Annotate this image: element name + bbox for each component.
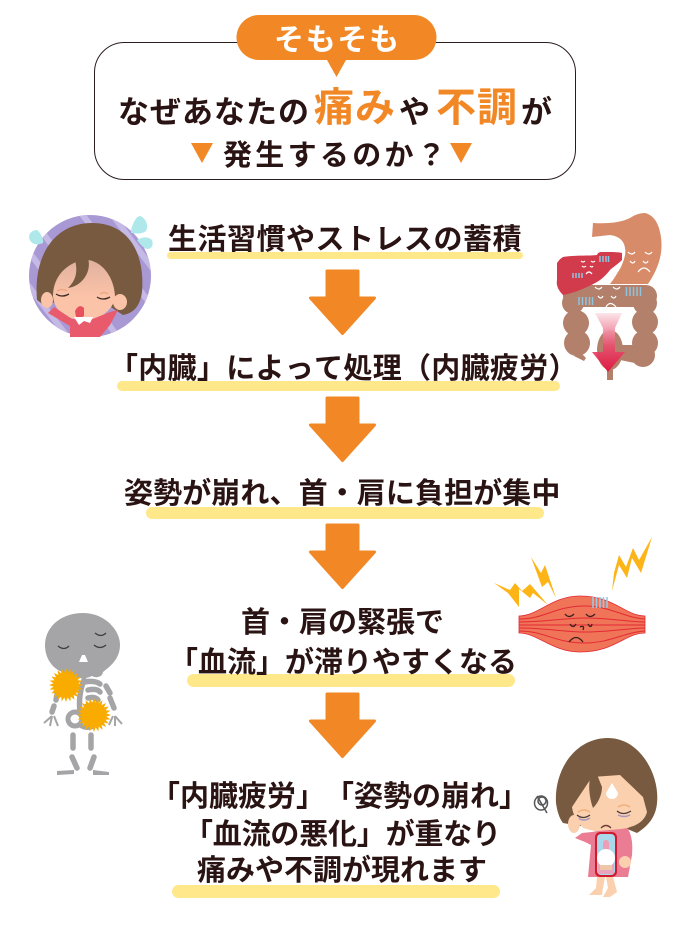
step 3 text: 姿勢が崩れ、首・肩に負担が集中 — [124, 476, 561, 510]
face — [572, 775, 647, 832]
arrow 4 — [310, 694, 374, 756]
step 5 text: 「内臓疲労」「姿勢の崩れ」 — [151, 780, 528, 813]
hair — [556, 738, 657, 833]
muscle face — [565, 614, 595, 642]
title badge — [236, 15, 436, 77]
sweat drop — [606, 783, 618, 799]
icon: tired internal organs — [557, 213, 662, 380]
liver — [557, 252, 622, 295]
organs panel — [595, 832, 617, 877]
arrow 1 — [310, 271, 374, 334]
icon: tired girl with organs — [534, 738, 657, 897]
muscle — [519, 596, 645, 652]
hand — [568, 815, 580, 833]
title line 1: 不調 — [436, 86, 518, 130]
lightning left — [494, 583, 548, 607]
stomach — [592, 213, 662, 284]
title line 1: なぜあなたの — [118, 95, 310, 130]
faces — [581, 252, 652, 307]
title line 1: や — [399, 95, 430, 130]
icon: skeleton with pain spots — [44, 613, 122, 775]
icon: sweat drops — [29, 216, 153, 249]
icon: tense muscle with lightning — [494, 537, 652, 652]
step 2 text: 「内臓」によって処理（内臓疲労） — [109, 352, 578, 385]
step 4 text — [169, 606, 517, 687]
icon: pain burst lower — [73, 694, 115, 736]
arrow 2 — [310, 398, 374, 460]
step 1 text: 生活習慣やストレスの蓄積 — [168, 223, 522, 256]
title panel — [94, 15, 576, 180]
title badge: そもそも — [274, 24, 401, 57]
downward arrow — [592, 313, 625, 372]
title line 1: が — [521, 95, 552, 130]
icon: girl with headache in circle — [29, 215, 153, 337]
title line 1 — [118, 86, 552, 130]
title line 1: 痛み — [314, 86, 396, 130]
step 4 text: 首・肩の緊張で — [241, 606, 444, 639]
colon — [562, 285, 658, 380]
step 5 text — [151, 780, 528, 898]
icon: pain burst upper — [45, 664, 87, 706]
legs — [589, 877, 617, 897]
title line 2: 発生するのか？ — [223, 139, 449, 172]
step 5 text: 「血流の悪化」が重なり — [184, 817, 501, 851]
icon: scribble — [534, 796, 548, 813]
dress — [575, 828, 632, 877]
stress marks — [573, 256, 640, 305]
step 4 text: 「血流」が滞りやすくなる — [169, 645, 517, 679]
lightning right — [612, 537, 652, 591]
arrow 3 — [310, 525, 374, 588]
step 5 text: 痛みや不調が現れます — [197, 853, 487, 887]
